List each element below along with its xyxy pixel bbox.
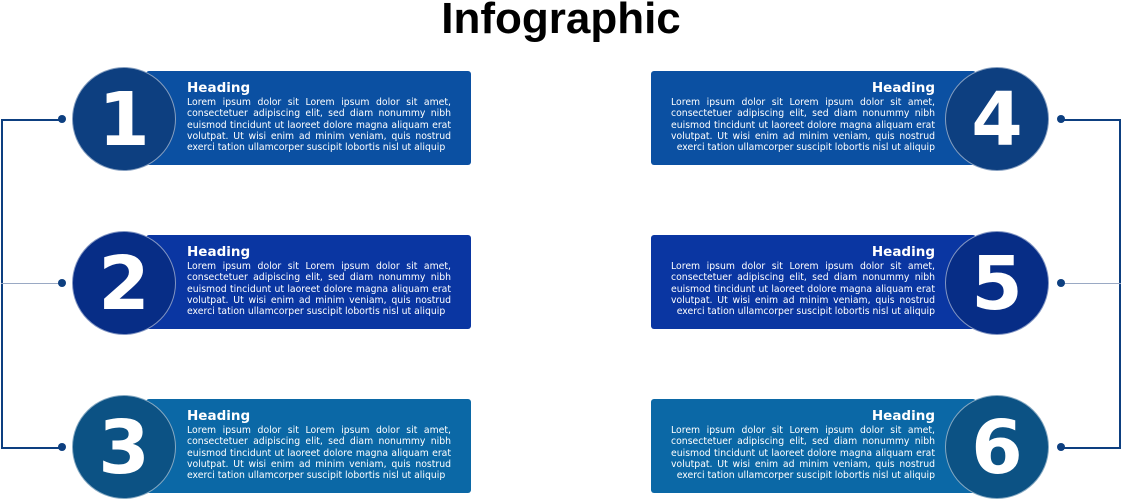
text: heading 5: Heading (872, 244, 935, 260)
text: heading 2: consectetuer adipiscing elit, sed diam nonummy nibh (187, 272, 451, 283)
icon: circle 5: 5 (971, 241, 1023, 327)
text: heading 2: Heading (187, 244, 250, 260)
text: heading 1: euismod tincidunt ut laoreet dolore magna aliquam erat (187, 120, 451, 131)
panel: 1 (146, 71, 471, 165)
text: heading 2: Lorem ipsum dolor sit Lorem ipsum dolor sit amet, (187, 261, 451, 272)
text: heading 6: Lorem ipsum dolor sit Lorem ipsum dolor sit amet, (671, 425, 935, 436)
panel: 3 (146, 399, 471, 493)
text: heading 5: euismod tincidunt ut laoreet dolore magna aliquam erat (671, 284, 935, 295)
icon: circle 6 (945, 395, 1049, 499)
icon: circle 1: 1 (98, 77, 150, 163)
text: heading 2: volutpat. Ut wisi enim ad minim veniam, quis nostrud (187, 295, 451, 306)
panel: 5 (651, 235, 976, 329)
text: heading 2: exerci tation ullamcorper suscipit lobortis nisl ut aliquip (187, 306, 445, 317)
text: heading 1: Heading (187, 80, 250, 96)
icon: circle 6: 6 (971, 405, 1023, 491)
text: heading 4 (671, 80, 935, 153)
text: heading 4: exerci tation ullamcorper suscipit lobortis nisl ut aliquip (677, 142, 935, 153)
text: heading 1: exerci tation ullamcorper suscipit lobortis nisl ut aliquip (187, 142, 445, 153)
text: heading 3: euismod tincidunt ut laoreet dolore magna aliquam erat (187, 448, 451, 459)
text: heading 3: Heading (187, 408, 250, 424)
text: heading 4: euismod tincidunt ut laoreet dolore magna aliquam erat (671, 120, 935, 131)
text: heading 5: consectetuer adipiscing elit, sed diam nonummy nibh (671, 272, 935, 283)
icon: circle 2 (72, 231, 176, 335)
icon: circle 2: 2 (98, 241, 150, 327)
text: heading 6: Heading (872, 408, 935, 424)
text: heading 6: euismod tincidunt ut laoreet dolore magna aliquam erat (671, 448, 935, 459)
text: heading 3: Lorem ipsum dolor sit Lorem ipsum dolor sit amet, (187, 425, 451, 436)
panel: 4 (651, 71, 976, 165)
text: heading 4: volutpat. Ut wisi enim ad minim veniam, quis nostrud (671, 131, 935, 142)
icon: circle 4: 4 (971, 77, 1023, 163)
icon: circle 1 (72, 67, 176, 171)
icon: circle 3: 3 (98, 405, 150, 491)
text: heading 6 (671, 408, 935, 481)
text: heading 5: Lorem ipsum dolor sit Lorem ipsum dolor sit amet, (671, 261, 935, 272)
text: heading 6: exerci tation ullamcorper suscipit lobortis nisl ut aliquip (677, 470, 935, 481)
text: heading 3: volutpat. Ut wisi enim ad minim veniam, quis nostrud (187, 459, 451, 470)
text: heading 4: Heading (872, 80, 935, 96)
panel: 6 (651, 399, 976, 493)
icon: circle 4 (945, 67, 1049, 171)
text: heading 6: consectetuer adipiscing elit, sed diam nonummy nibh (671, 436, 935, 447)
text: heading 3: exerci tation ullamcorper suscipit lobortis nisl ut aliquip (187, 470, 445, 481)
text: heading 1: volutpat. Ut wisi enim ad minim veniam, quis nostrud (187, 131, 451, 142)
text: heading 2 (187, 244, 451, 317)
text: heading 5: volutpat. Ut wisi enim ad minim veniam, quis nostrud (671, 295, 935, 306)
text: heading 5 (671, 244, 935, 317)
connector: right (1057, 115, 1121, 451)
icon: circle 3 (72, 395, 176, 499)
text: heading 4: consectetuer adipiscing elit, sed diam nonummy nibh (671, 108, 935, 119)
text: heading 3: consectetuer adipiscing elit, sed diam nonummy nibh (187, 436, 451, 447)
text: heading 1: Lorem ipsum dolor sit Lorem ipsum dolor sit amet, (187, 97, 451, 108)
icon: circle 5 (945, 231, 1049, 335)
connector: left (1, 115, 66, 451)
text: heading 2: euismod tincidunt ut laoreet dolore magna aliquam erat (187, 284, 451, 295)
text: heading 1: consectetuer adipiscing elit, sed diam nonummy nibh (187, 108, 451, 119)
text: heading 5: exerci tation ullamcorper suscipit lobortis nisl ut aliquip (677, 306, 935, 317)
text: heading 6: volutpat. Ut wisi enim ad minim veniam, quis nostrud (671, 459, 935, 470)
text: heading 4: Lorem ipsum dolor sit Lorem ipsum dolor sit amet, (671, 97, 935, 108)
panel: 2 (146, 235, 471, 329)
text: heading 3 (187, 408, 451, 481)
text: heading 1 (187, 80, 451, 153)
